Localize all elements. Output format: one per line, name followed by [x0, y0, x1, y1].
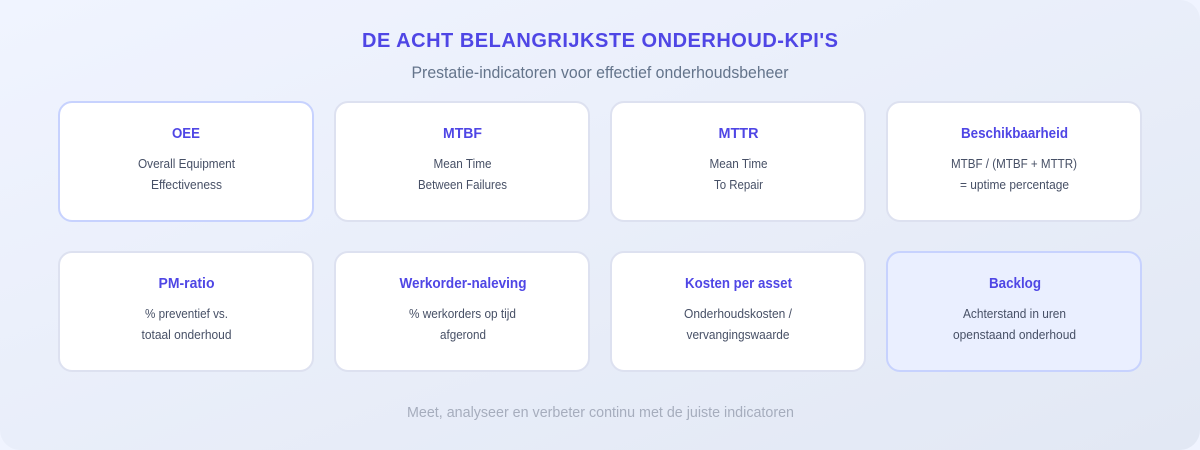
card description: MTBF: Mean Time — [434, 157, 492, 171]
card description: Backlog: openstaand onderhoud — [953, 328, 1076, 342]
card description: Werkorder-naleving: afgerond — [440, 328, 486, 342]
card: Kosten per asset — [611, 252, 865, 371]
subtitle: Prestatie-indicatoren voor effectief onderhoudsbeheer — [412, 64, 789, 82]
card description: Beschikbaarheid — [951, 157, 1077, 192]
footer note: Meet, analyseer en verbeter continu met de juiste indicatoren — [407, 405, 794, 421]
card: OEE — [59, 102, 313, 221]
title: DE ACHT BELANGRIJKSTE ONDERHOUD-KPI'S — [362, 30, 838, 52]
card heading: Backlog: Backlog — [989, 276, 1041, 292]
card description: Beschikbaarheid: MTBF / (MTBF + MTTR) — [951, 157, 1077, 171]
card heading: MTBF: MTBF — [443, 126, 482, 142]
card: MTBF — [335, 102, 589, 221]
card heading: Werkorder-naleving: Werkorder-naleving — [400, 276, 526, 292]
card description: Kosten per asset: Onderhoudskosten / — [684, 307, 793, 321]
card description: PM-ratio: totaal onderhoud — [142, 328, 232, 342]
card description: OEE: Overall Equipment — [138, 157, 235, 171]
card: Werkorder-naleving — [335, 252, 589, 371]
card description: OEE: Effectiveness — [151, 178, 222, 192]
card description: MTTR: To Repair — [714, 178, 763, 192]
card description: Werkorder-naleving — [409, 307, 516, 342]
card description: MTTR — [710, 157, 768, 192]
card description: Kosten per asset — [684, 307, 793, 342]
card heading: PM-ratio: PM-ratio — [158, 276, 215, 292]
card: PM-ratio — [59, 252, 313, 371]
card heading: Beschikbaarheid: Beschikbaarheid — [961, 126, 1068, 142]
card description: OEE — [138, 157, 235, 192]
card heading: MTTR: MTTR — [718, 126, 759, 142]
card description: MTTR: Mean Time — [710, 157, 768, 171]
card description: PM-ratio — [142, 307, 232, 342]
card description: PM-ratio: % preventief vs. — [145, 307, 228, 321]
card: Backlog — [887, 252, 1141, 371]
card description: Backlog — [953, 307, 1076, 342]
card description: MTBF: Between Failures — [418, 178, 507, 192]
card description: MTBF — [418, 157, 507, 192]
card description: Werkorder-naleving: % werkorders op tijd — [409, 307, 516, 321]
card description: Backlog: Achterstand in uren — [963, 307, 1066, 321]
card description: Kosten per asset: vervangingswaarde — [686, 328, 790, 342]
card heading: OEE: OEE — [172, 126, 200, 142]
card description: Beschikbaarheid: = uptime percentage — [960, 178, 1069, 192]
card heading: Kosten per asset: Kosten per asset — [685, 276, 792, 292]
card: MTTR — [611, 102, 865, 221]
card: Beschikbaarheid — [887, 102, 1141, 221]
